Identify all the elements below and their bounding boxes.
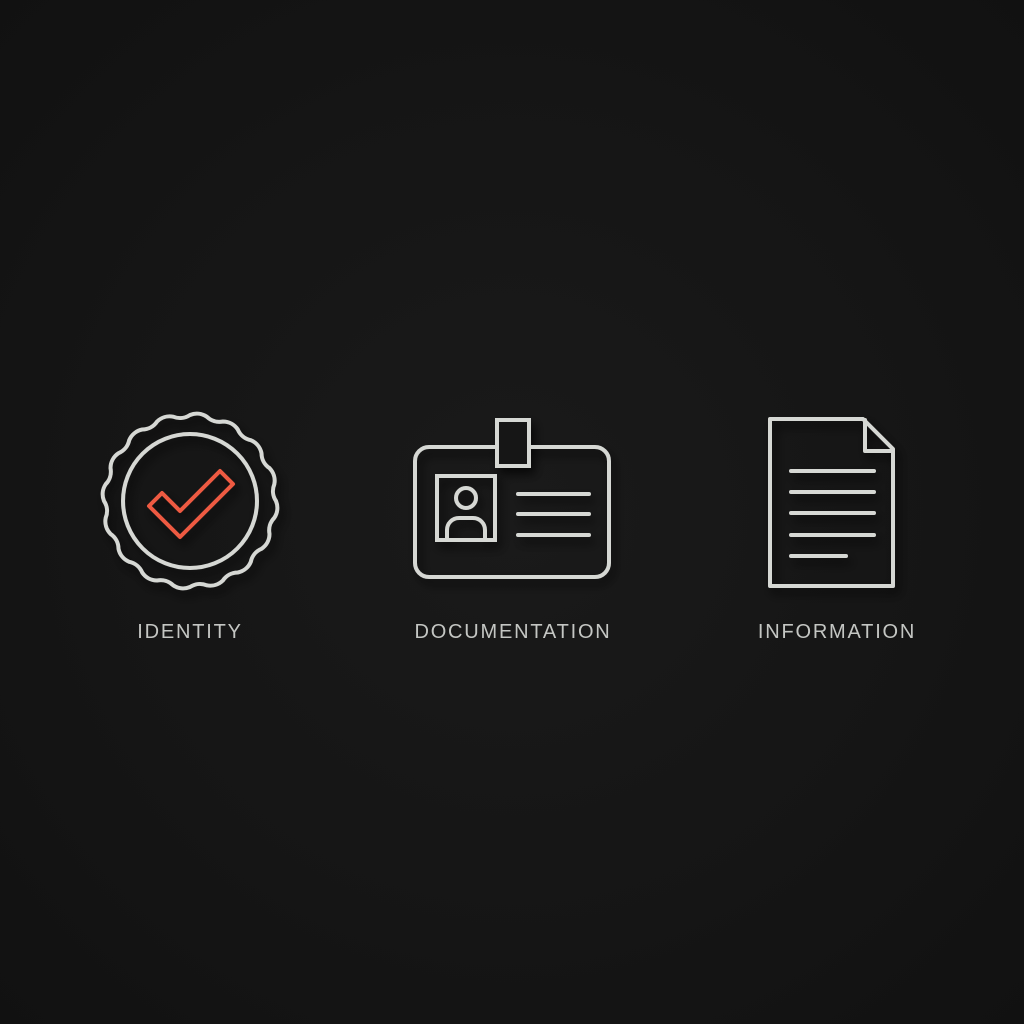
badge wavy outer ring [103, 414, 277, 588]
badge inner circle [123, 434, 257, 568]
icon: ID card [415, 420, 609, 577]
icon: document [770, 419, 893, 586]
red check mark [149, 471, 233, 537]
label: identity: IDENTITY [137, 621, 243, 643]
label: documentation: DOCUMENTATION [414, 621, 612, 643]
icon: identity badge [103, 414, 277, 588]
label: information: INFORMATION [758, 621, 916, 643]
